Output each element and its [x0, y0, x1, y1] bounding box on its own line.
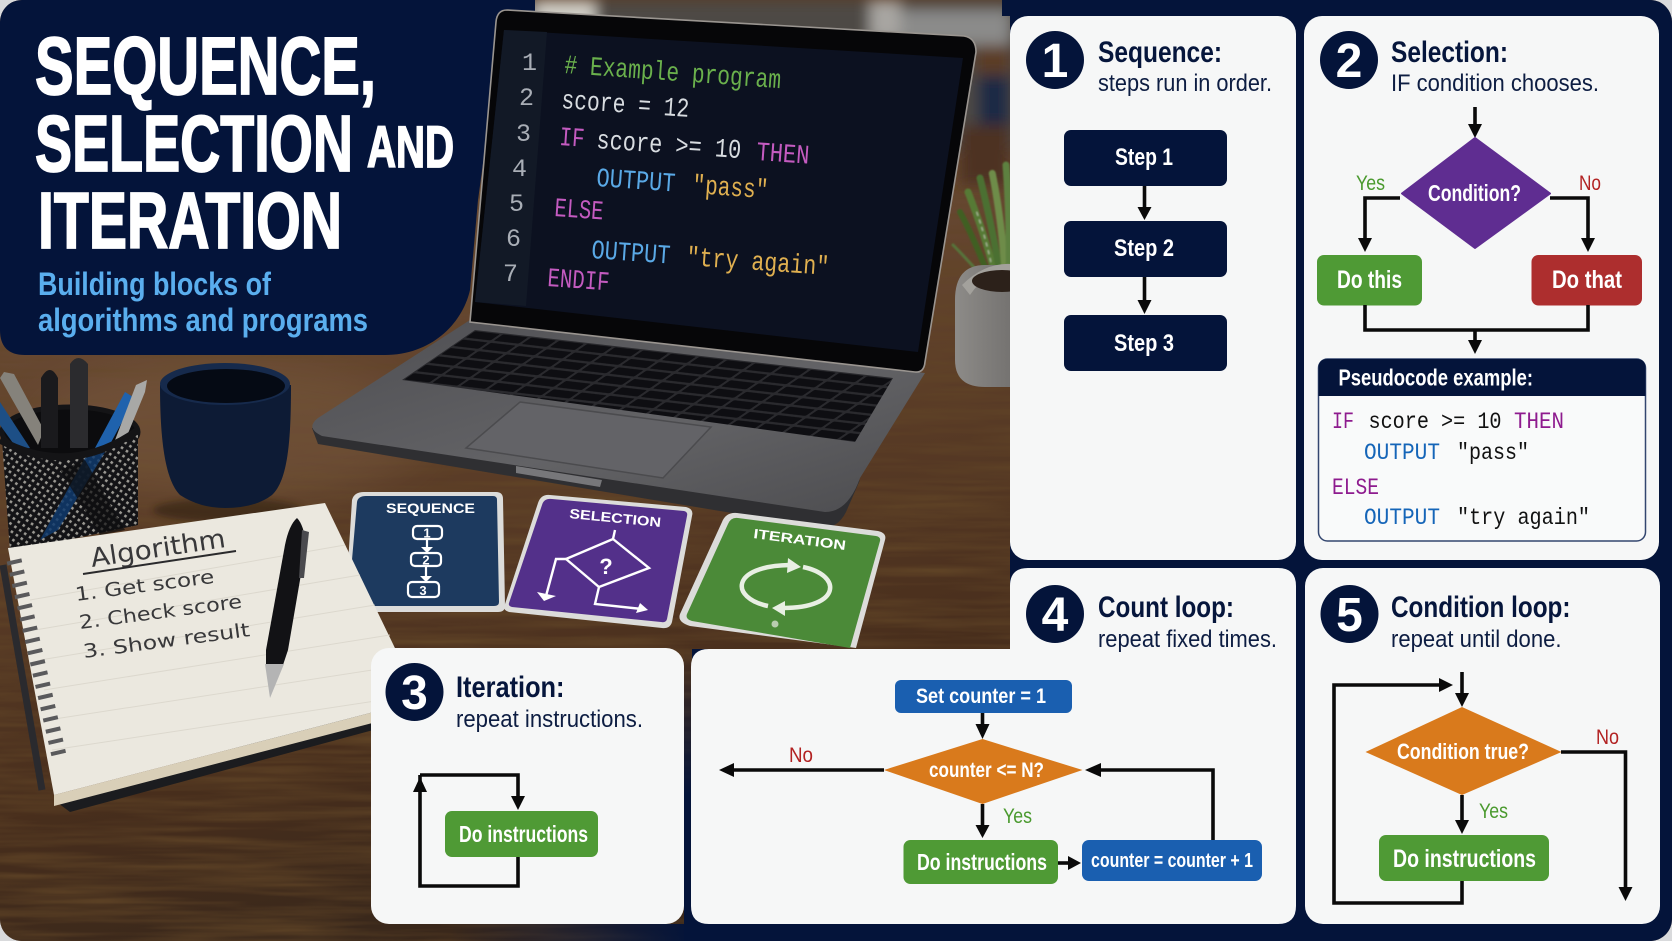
pseudocode heading: Pseudocode example:: [1338, 364, 1533, 390]
icon: decision diamond: [537, 530, 649, 613]
step 2 box: [1064, 221, 1227, 277]
main title: AND: [367, 115, 454, 180]
step 1 box: Step 1: [1115, 144, 1173, 171]
do instructions box: Do instructions: [917, 849, 1047, 875]
line numbers: [504, 54, 536, 281]
icon: three steps: 1: [423, 526, 431, 540]
icon: three steps: 3: [419, 583, 427, 598]
do that box: Do that: [1552, 266, 1623, 294]
no branch: No: [1579, 172, 1601, 195]
number badge 4: 4: [1042, 589, 1069, 642]
do instructions box: [445, 811, 598, 857]
line numbers: 6: [506, 225, 521, 254]
decision diamond: Condition?: [1428, 180, 1521, 206]
number badge 2: 2: [1336, 35, 1362, 88]
decision diamond: [1402, 138, 1550, 248]
yes arrow: Yes: [1003, 805, 1032, 828]
pseudocode lines: OUTPUT: [1364, 440, 1440, 466]
heading: Iteration:: [456, 671, 564, 704]
heading: Condition loop:: [1391, 591, 1570, 624]
counter increment box: counter = counter + 1: [1091, 850, 1253, 872]
card: iteration: ITERATION: [753, 526, 847, 553]
keyboard: [402, 330, 893, 442]
decision diamond: [1366, 707, 1562, 795]
main title: [36, 36, 453, 250]
merge arrow: [1365, 305, 1588, 354]
icon: decision diamond: ?: [599, 554, 613, 579]
card: selection: SELECTION: [569, 506, 662, 530]
pseudocode lines: [1332, 409, 1590, 531]
pseudocode box: [1318, 359, 1646, 541]
main title: ITERATION: [38, 176, 342, 265]
counter increment box: [1082, 840, 1262, 881]
laptop: [312, 10, 976, 528]
code on screen: "pass": [691, 172, 769, 207]
number badge 5: 5: [1336, 589, 1363, 642]
handwriting: algorithm: 3. Show result: [82, 619, 251, 663]
decision diamond: counter <= N?: [929, 759, 1044, 782]
screen lid: [470, 10, 976, 372]
notebook: [3, 503, 440, 812]
step 3 box: [1064, 315, 1227, 371]
line numbers: 1: [522, 49, 537, 78]
pen: [265, 518, 309, 698]
description: IF condition chooses.: [1391, 70, 1599, 97]
description: repeat instructions.: [456, 706, 643, 733]
card: sequence: SEQUENCE: [386, 501, 475, 516]
panel 5: condition loop: [1305, 568, 1660, 924]
do instructions box: [904, 840, 1058, 884]
pseudocode lines: ELSE: [1332, 475, 1379, 501]
do this box: [1317, 255, 1422, 306]
loop arrows: [413, 775, 525, 886]
main title: SEQUENCE,: [35, 21, 376, 112]
panel 4: count loop: [691, 568, 1296, 924]
yes arrow: [1455, 795, 1508, 834]
code on screen: score >= 10: [595, 127, 742, 167]
no exit arrow: No: [1596, 726, 1619, 749]
code on screen: # Example program: [563, 52, 782, 97]
pseudocode lines: "try again": [1457, 505, 1590, 531]
number badge 1: 1: [1042, 35, 1068, 88]
entry arrow: [1468, 107, 1482, 138]
panel 3: iteration: [371, 648, 684, 924]
do instructions box: Do instructions: [459, 821, 588, 847]
no branch: [1550, 172, 1601, 252]
pseudocode lines: score >= 10: [1368, 409, 1502, 435]
loop back arrow: [1334, 678, 1462, 903]
heading: Count loop:: [1098, 591, 1234, 624]
do that box: [1532, 255, 1642, 306]
card: iteration: [679, 513, 885, 648]
pseudocode lines: "pass": [1457, 440, 1529, 466]
decision diamond: [884, 739, 1082, 804]
handwriting: algorithm: 2. Check score: [78, 591, 243, 634]
arrow: [1138, 277, 1152, 314]
code on screen: OUTPUT: [595, 165, 676, 200]
yes arrow: Yes: [1479, 800, 1508, 823]
card: selection: [504, 495, 692, 628]
decision diamond: Condition true?: [1397, 739, 1529, 764]
subtitle: [38, 266, 368, 338]
step 3 box: Step 3: [1114, 330, 1174, 357]
navy frame: [450, 0, 1672, 941]
pseudocode lines: THEN: [1514, 409, 1564, 435]
icon: three steps: 2: [422, 552, 430, 568]
no exit arrow: No: [789, 744, 813, 767]
description: repeat until done.: [1391, 626, 1562, 653]
do instructions box: [1379, 835, 1549, 881]
icon: three steps: [408, 526, 442, 598]
line numbers: 2: [519, 84, 534, 113]
main title: SELECTION: [35, 99, 353, 188]
number badge 4: [1026, 585, 1084, 643]
description: steps run in order.: [1098, 70, 1272, 97]
pseudocode lines: OUTPUT: [1364, 505, 1440, 531]
card: sequence: [345, 492, 505, 612]
ruled lines: [30, 545, 415, 750]
code on screen: OUTPUT: [590, 237, 671, 272]
do instructions box: Do instructions: [1393, 845, 1536, 873]
subtitle: Building blocks of: [38, 266, 271, 302]
arrow: [976, 713, 990, 739]
arrow: [1138, 186, 1152, 220]
spiral binding: [3, 560, 60, 790]
do this box: Do this: [1337, 266, 1402, 294]
title block: [0, 0, 535, 355]
code on screen: ENDIF: [546, 265, 610, 299]
plant in concrete pot: [951, 160, 1010, 387]
handwriting: algorithm: [76, 533, 250, 658]
line numbers: 3: [516, 120, 531, 149]
yes branch: Yes: [1356, 172, 1385, 195]
set counter box: Set counter = 1: [916, 685, 1046, 708]
icon: cycle arrows: [742, 558, 830, 628]
code on screen: IF: [558, 124, 585, 156]
line numbers: 5: [509, 190, 524, 219]
step 1 box: [1064, 130, 1227, 186]
number badge 3: [386, 663, 444, 721]
heading: Sequence:: [1098, 36, 1222, 69]
code on screen: score = 12: [560, 87, 690, 126]
panel 2: selection: [1304, 16, 1659, 560]
yes arrow: [976, 804, 1032, 838]
number badge 2: [1320, 31, 1378, 89]
no exit arrow: [1561, 726, 1632, 901]
no exit arrow: [719, 744, 884, 777]
panel 1: sequence: [1010, 16, 1296, 560]
display: [475, 30, 963, 352]
pseudocode lines: IF: [1332, 409, 1354, 435]
handwriting: algorithm: Algorithm: [89, 524, 228, 574]
line numbers: 4: [512, 155, 527, 184]
handwriting: algorithm: 1. Get score: [74, 566, 215, 606]
loop back arrow: [1085, 763, 1213, 840]
step 2 box: Step 2: [1114, 235, 1174, 262]
number badge 5: [1320, 585, 1378, 643]
entry arrow: [1455, 672, 1469, 707]
code on screen: THEN: [755, 139, 810, 173]
line numbers: 7: [503, 260, 518, 289]
trackpad: [466, 402, 711, 478]
heading: Selection:: [1391, 36, 1508, 69]
pencil cup with pens: [0, 358, 147, 552]
description: repeat fixed times.: [1098, 626, 1277, 653]
laptop base: [312, 320, 925, 528]
number badge 3: 3: [401, 667, 428, 720]
coffee mug: [153, 363, 303, 522]
code on screen: "try again": [685, 244, 830, 284]
subtitle: algorithms and programs: [38, 302, 368, 338]
set counter box: [895, 680, 1072, 713]
yes branch: [1356, 172, 1400, 252]
arrow: [1058, 856, 1081, 870]
code on screen: ELSE: [553, 195, 604, 228]
code on screen: [503, 49, 830, 299]
number badge 1: [1026, 31, 1084, 89]
